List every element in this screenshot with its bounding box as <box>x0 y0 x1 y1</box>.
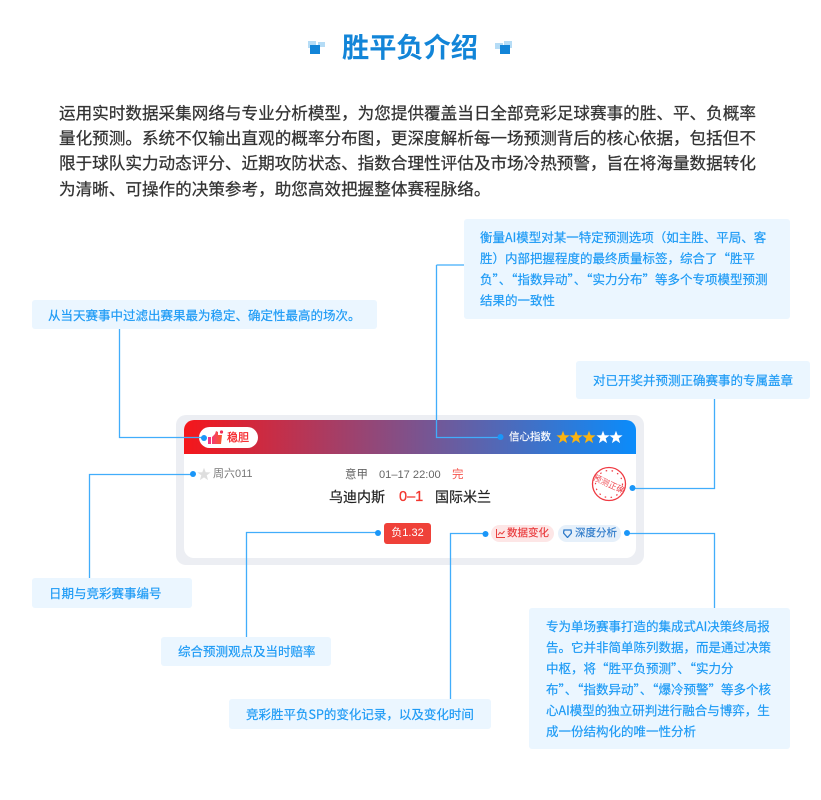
callout: date and number: 日期与竞彩赛事编号 <box>49 583 162 602</box>
callout: stable picks <box>32 300 377 329</box>
callout: stamp <box>576 361 810 399</box>
intro text: 限于球队实力动态评分、近期攻防状态、指数合理性评估及市场冷热预警，旨在将海量数据转化 <box>59 154 756 173</box>
callout: confidence index: 衡量AI模型对某一特定预测选项（如主胜、平局、客 <box>480 227 766 246</box>
panel: match card: 01–17 22:00 <box>379 469 441 481</box>
card header gradient <box>184 420 636 454</box>
callout: confidence index <box>464 219 790 319</box>
callout: deep analysis: 成一份结构化的唯一性分析 <box>546 721 696 740</box>
callout: SP change: 竞彩胜平负SP的变化记录，以及变化时间 <box>246 704 474 723</box>
callout: deep analysis: 布”、“指数异动”、“爆冷预警”等多个核 <box>546 679 771 698</box>
tag: deep analysis <box>558 525 621 542</box>
score: 0–1 <box>399 489 423 505</box>
icon: grey star <box>198 468 210 480</box>
callout: odds <box>161 637 331 666</box>
intro text: 为清晰、可操作的决策参考，助您高效把握整体赛程脉络。 <box>59 180 490 199</box>
match number: 周六011 <box>213 468 253 480</box>
panel: card inner <box>184 420 636 558</box>
callout: confidence index: 胜）内部把握程度的最终质量标签，综合了“胜平 <box>480 248 755 267</box>
panel: match card <box>176 415 644 565</box>
callout: deep analysis <box>529 608 790 749</box>
icon: thumbs up <box>208 430 224 444</box>
icon: title decoration left <box>308 41 325 54</box>
badge: 稳胆 <box>199 427 258 448</box>
tag: data change <box>491 525 554 542</box>
away team: 国际米兰 <box>435 489 491 505</box>
match status: 完 <box>452 469 464 481</box>
callout: stamp: 对已开奖并预测正确赛事的专属盖章 <box>593 370 793 389</box>
home team: 乌迪内斯 <box>329 489 385 505</box>
callout: confidence index: 负”、“指数异动”、“实力分布”等多个专项模型预测 <box>480 269 768 288</box>
confidence stars <box>556 430 622 444</box>
callout: date and number <box>32 578 192 608</box>
icon: title decoration right <box>495 41 512 54</box>
icon: line chart <box>496 529 505 538</box>
callout: deep analysis: 中枢，将“胜平负预测”、“实力分 <box>546 658 734 677</box>
icon: shield <box>563 529 572 538</box>
title: 胜平负介绍 <box>342 32 478 63</box>
badge label: 稳胆 <box>227 432 249 444</box>
intro text <box>59 104 756 199</box>
callout: stable picks: 从当天赛事中过滤出赛果最为稳定、确定性最高的场次。 <box>48 305 361 324</box>
callout: confidence index: 结果的一致性 <box>480 290 555 309</box>
tag label: 深度分析 <box>575 527 617 539</box>
callout: deep analysis: 心AI模型的独立研判进行融合与博弈，生 <box>546 700 770 719</box>
intro text: 运用实时数据采集网络与专业分析模型，为您提供覆盖当日全部竞彩足球赛事的胜、平、负概率 <box>59 104 756 123</box>
league and time: 意甲 <box>345 469 368 481</box>
icon: prediction correct stamp <box>591 466 627 502</box>
tag label: 数据变化 <box>507 527 549 539</box>
odds tag <box>384 523 431 544</box>
callout: SP change <box>229 699 491 729</box>
icon: prediction correct stamp: 预测正确 <box>591 472 627 496</box>
label: confidence index: 信心指数 <box>509 431 551 443</box>
callout: deep analysis: 告。它并非简单陈列数据，而是通过决策 <box>546 637 771 656</box>
intro text: 量化预测。系统不仅输出直观的概率分布图，更深度解析每一场预测背后的核心依据，包括但不 <box>59 129 756 148</box>
callout: deep analysis: 专为单场赛事打造的集成式AI决策终局报 <box>546 616 770 635</box>
callout: odds: 综合预测观点及当时赔率 <box>178 641 316 660</box>
odds tag: 负1.32 <box>391 527 424 539</box>
